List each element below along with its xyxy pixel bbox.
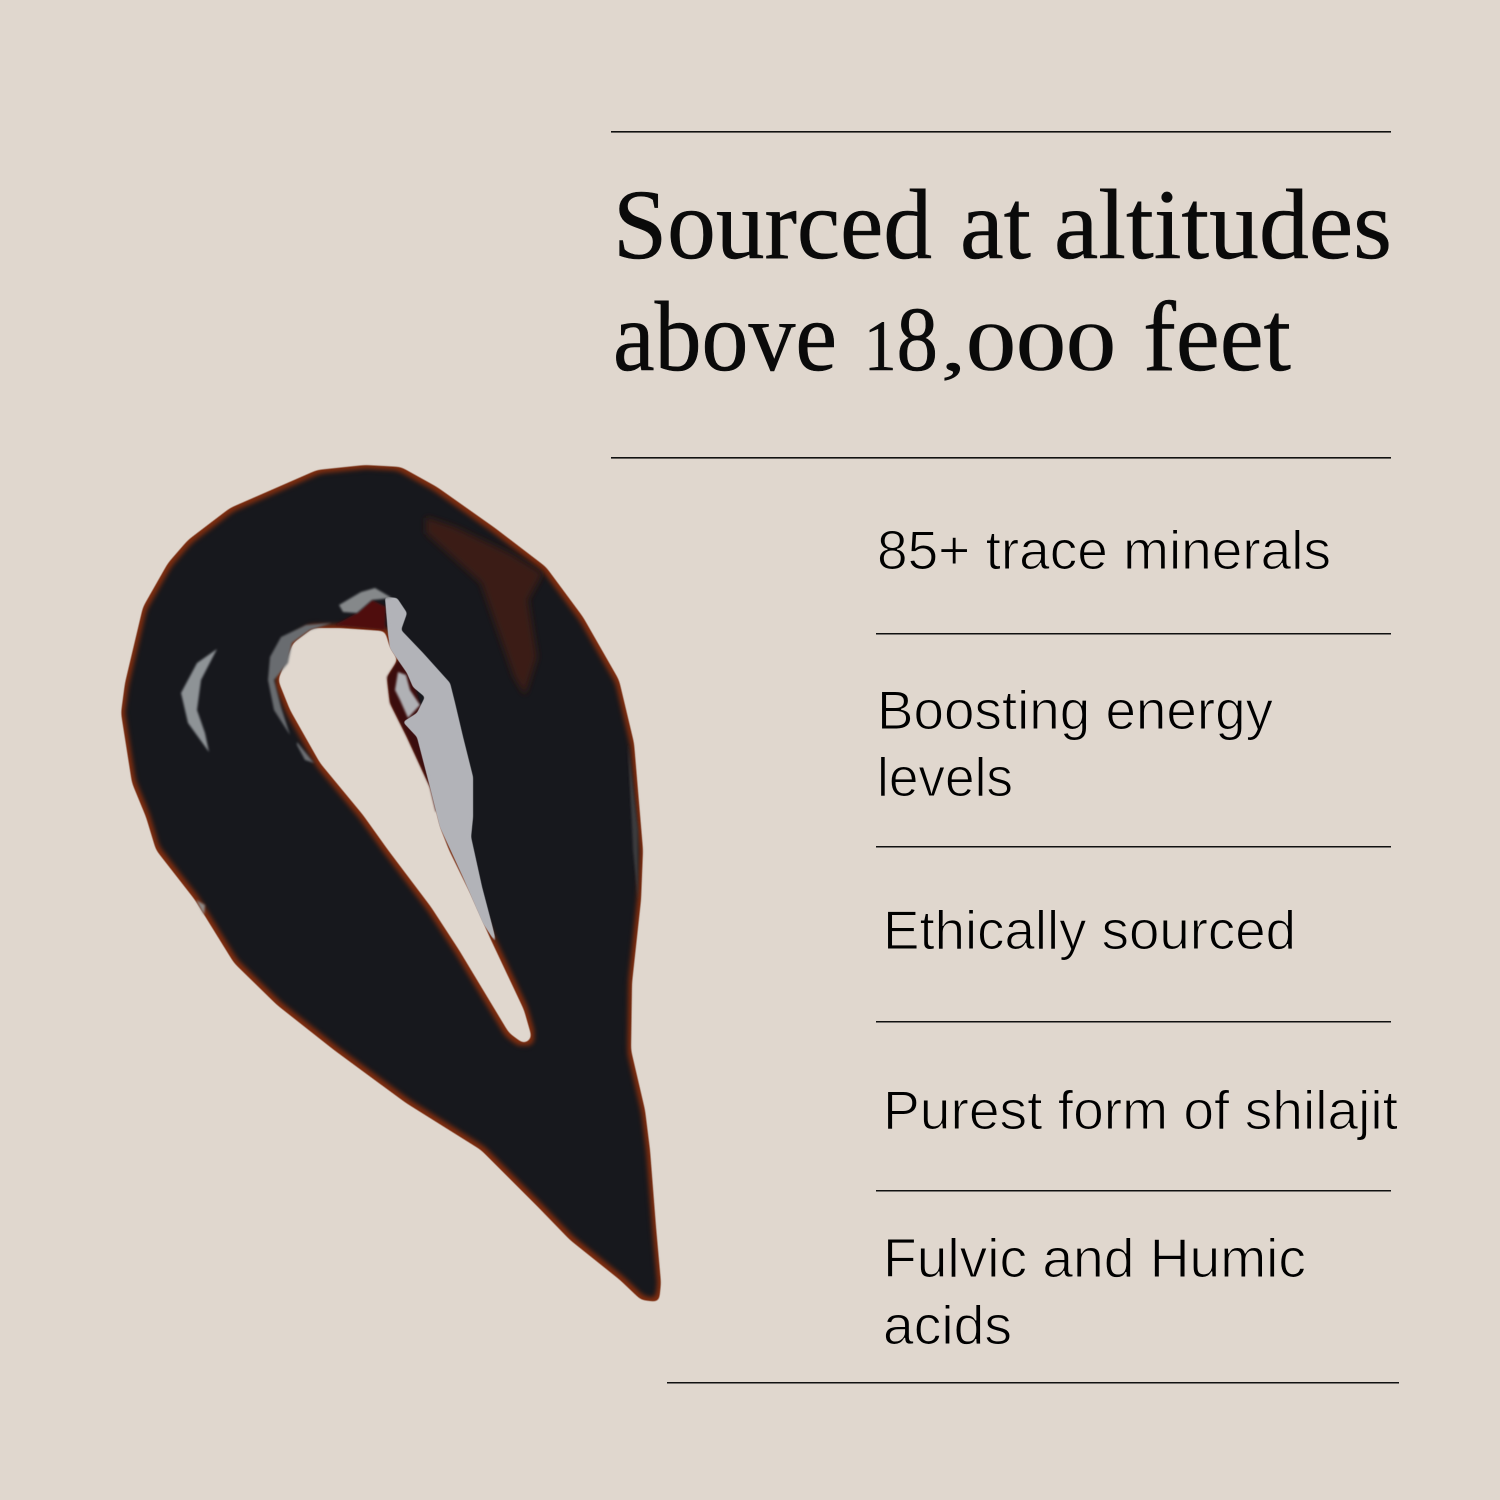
- bottom rule: [667, 1382, 1399, 1384]
- benefit: fulvic and humic acids: [883, 1227, 1306, 1356]
- grey sliver: [297, 742, 314, 763]
- image: dark shilajit resin smear: [121, 465, 661, 1302]
- resin dark body: [121, 465, 661, 1302]
- benefit: fulvic and humic acids: Fulvic and Humic: [883, 1227, 1306, 1289]
- grey crescent left: [181, 649, 217, 752]
- heading line 2: [613, 281, 1291, 392]
- benefit: purest form: Purest form of shilajit: [883, 1079, 1398, 1141]
- rule after trace minerals: [876, 633, 1391, 634]
- grey top bump: [339, 588, 392, 613]
- benefit: ethically sourced: Ethically sourced: [883, 899, 1296, 961]
- grey band around opening: [268, 623, 332, 735]
- heading line 2: feet: [1143, 281, 1291, 392]
- rule above heading: [611, 131, 1391, 133]
- grey highlight small: [395, 672, 420, 718]
- heading line 2: 18: [864, 288, 938, 390]
- right edge sheen: [628, 743, 638, 900]
- heading block: [613, 169, 1392, 392]
- heading line 2: ,000: [941, 309, 1116, 385]
- benefit: energy levels: [877, 679, 1273, 808]
- heading line 1: at: [960, 169, 1031, 280]
- rule after ethically sourced: [876, 1021, 1391, 1022]
- dark red area beside highlight: [387, 660, 447, 812]
- rule below heading: [611, 457, 1391, 459]
- heading line 2: above: [613, 281, 837, 392]
- benefit: trace minerals: 85+ trace minerals: [877, 519, 1331, 581]
- heading line 1: [613, 169, 1392, 280]
- benefit: fulvic and humic acids: acids: [883, 1294, 1012, 1356]
- heading line 1: Sourced: [613, 169, 932, 280]
- rule after energy levels: [876, 846, 1391, 848]
- resin amber rim: [121, 465, 661, 1302]
- rule after purest form: [876, 1190, 1391, 1192]
- lower left edge sheen: [196, 900, 205, 915]
- benefit: energy levels: levels: [877, 746, 1013, 808]
- dark red top area: [335, 600, 386, 630]
- benefit: energy levels: Boosting energy: [877, 679, 1273, 741]
- heading line 1: altitudes: [1054, 169, 1392, 280]
- brown translucent patch: [426, 517, 543, 695]
- grey highlight main: [385, 597, 497, 945]
